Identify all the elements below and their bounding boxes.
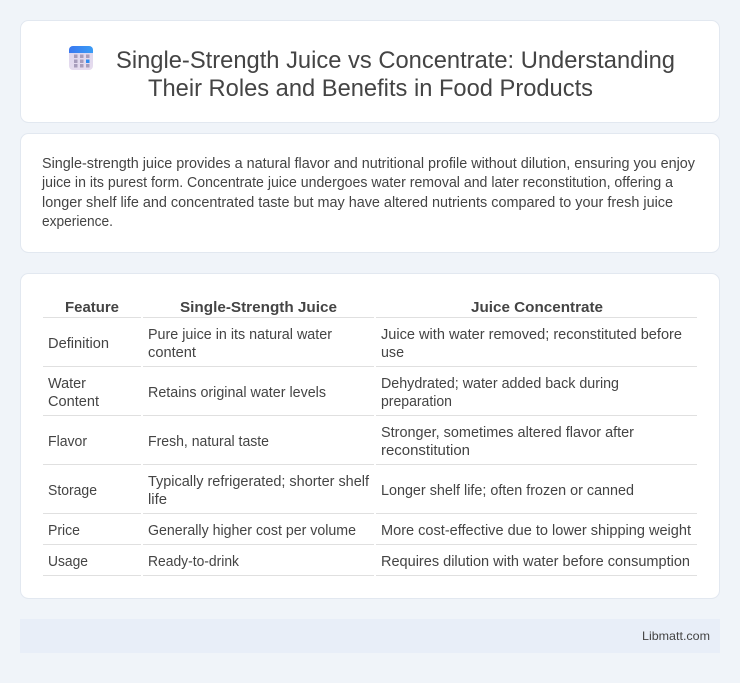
- table header: Single-Strength Juice: [180, 300, 337, 316]
- row: usage: Requires dilution with water before consumption: [381, 554, 690, 570]
- row: water content: Dehydrated; water added back during: [381, 376, 619, 392]
- row: definition: Pure juice in its natural water: [148, 327, 332, 343]
- row: price: [48, 523, 691, 539]
- text block: introduction: [41, 156, 696, 230]
- row: water content: Retains original water levels: [148, 385, 326, 401]
- row: flavor: Flavor: [48, 434, 87, 450]
- row: flavor: reconstitution: [381, 443, 470, 459]
- row: storage: life: [148, 492, 167, 508]
- text block: introduction: longer shelf life and concentrated taste but may have altered nutrients compared to your fresh juice: [42, 195, 673, 211]
- table header: Juice Concentrate: [471, 300, 603, 316]
- row: flavor: Fresh, natural taste: [148, 434, 269, 450]
- row: usage: Ready-to-drink: [148, 554, 240, 570]
- row: water content: Water: [48, 376, 86, 392]
- panel: title: [20, 20, 720, 122]
- row: storage: Storage: [48, 483, 97, 499]
- heading: Their Roles and Benefits in Food Products: [148, 75, 593, 102]
- footer credit: Libmatt.com: [642, 629, 710, 643]
- row: price: Price: [48, 523, 80, 539]
- text block: introduction: juice in its purest form. Concentrate juice undergoes water removal and later reconstitution, offering a: [41, 175, 673, 191]
- row: water content: preparation: [381, 394, 452, 410]
- row: price: Generally higher cost per volume: [148, 523, 356, 539]
- row: water content: Content: [48, 394, 99, 410]
- row: water content: [48, 376, 619, 410]
- row: flavor: [48, 425, 634, 459]
- table header: [65, 300, 603, 316]
- row: storage: Longer shelf life; often frozen or canned: [381, 483, 634, 499]
- row: storage: [48, 474, 634, 508]
- heading: [116, 47, 675, 102]
- row: definition: content: [148, 345, 196, 361]
- row: definition: Definition: [48, 336, 109, 352]
- row: definition: use: [381, 345, 404, 361]
- row: definition: Juice with water removed; reconstituted before: [381, 327, 682, 343]
- row: usage: [48, 554, 690, 570]
- table rules: [43, 317, 697, 576]
- row: flavor: Stronger, sometimes altered flavor after: [381, 425, 634, 441]
- footer: [20, 619, 720, 653]
- row: usage: Usage: [48, 554, 88, 570]
- icon: calendar: [69, 46, 93, 70]
- panel: comparison table: [20, 274, 720, 598]
- row: price: More cost-effective due to lower shipping weight: [381, 523, 691, 539]
- row: definition: [48, 327, 682, 361]
- row: storage: Typically refrigerated; shorter shelf: [148, 474, 370, 490]
- text block: introduction: experience.: [42, 214, 113, 230]
- table header: Feature: [65, 300, 119, 316]
- text block: introduction: Single-strength juice provides a natural flavor and nutritional profile without dilution, ensuring you enjoy: [42, 156, 696, 172]
- heading: Single-Strength Juice vs Concentrate: Understanding: [116, 47, 675, 74]
- panel: introduction: [20, 134, 720, 252]
